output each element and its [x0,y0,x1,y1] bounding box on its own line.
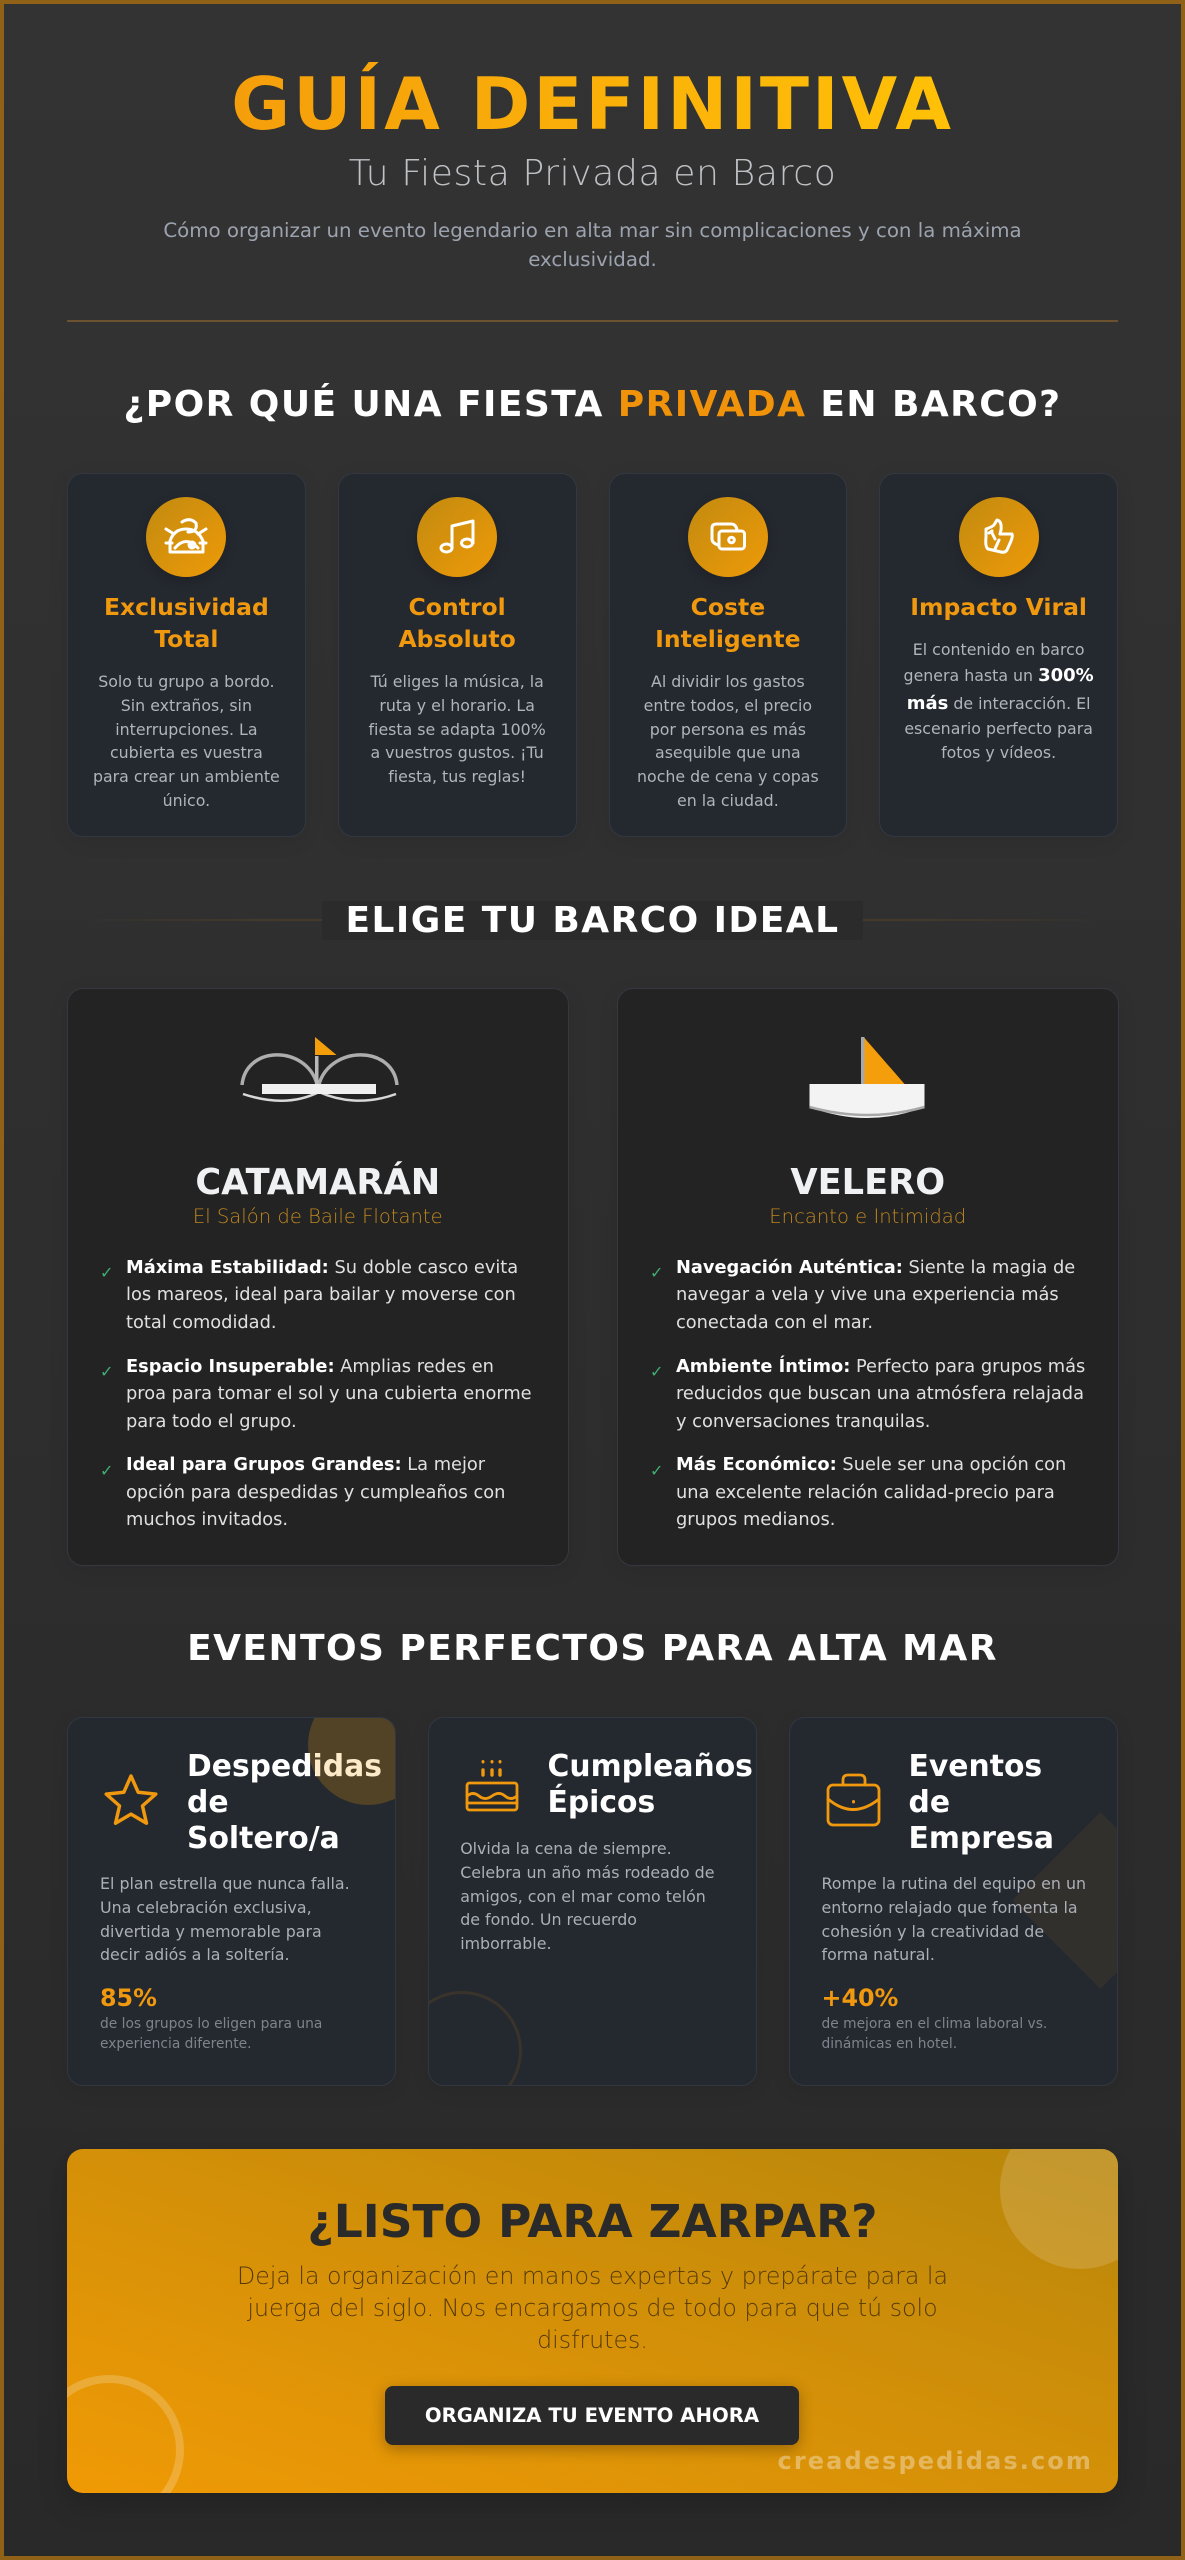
intro text: Cómo organizar un evento legendario en alta mar sin complicaciones y con la máxima [163,219,1022,242]
card text: genera hasta un 300% [904,665,1094,686]
boat title: VELERO [790,1162,945,1203]
icon: pulgar [959,497,1039,577]
feature list: ✓ [100,1461,113,1480]
card title [548,1749,753,1820]
card title: Empresa [908,1821,1054,1856]
intro text: exclusividad. [528,248,657,270]
card text: asequible que una [655,743,801,762]
card title: Impacto Viral [910,593,1087,621]
icon: exclusividad [146,497,226,577]
icon: billetes [688,497,768,577]
card text: entorno relajado que fomenta la [822,1898,1078,1917]
card title: Control [409,593,506,621]
icon: tarta [466,1760,518,1812]
feature list: ✓ [100,1362,113,1381]
card text: Celebra un año más rodeado de [460,1863,714,1882]
feature list: Espacio Insuperable: Amplias redes en [126,1356,494,1376]
icon: catamarán [240,1037,399,1102]
card title: Despedidas [187,1749,382,1784]
card text: Tú eliges la música, la [370,672,544,691]
panel: coste inteligente [608,473,847,837]
feature list: proa para tomar el sol y una cubierta enorme [126,1383,532,1404]
card text [368,672,546,786]
card text: entre todos, el precio [644,696,812,715]
card title [398,593,516,653]
card text: Sin extraños, sin [121,696,252,715]
card title: Total [154,625,218,653]
card text: fotos y vídeos. [941,743,1056,762]
cta text: disfrutes. [537,2326,648,2354]
card title [104,593,269,653]
card text [93,672,280,810]
boat subtitle: Encanto e Intimidad [769,1205,966,1228]
panel: impacto viral [879,473,1118,837]
card text: Al dividir los gastos [651,672,805,691]
panel: control absoluto [338,473,576,837]
card title: Coste [691,593,765,621]
card text: interrupciones. La [115,720,258,739]
card text: noche de cena y copas [637,767,819,786]
boat title: CATAMARÁN [195,1162,440,1203]
feature list [650,1256,1085,1530]
card title: Épicos [548,1785,655,1820]
card text: Solo tu grupo a bordo. [98,672,275,691]
card text: El plan estrella que nunca falla. [100,1874,350,1893]
feature list: ✓ [650,1362,663,1381]
card title: Inteligente [655,625,801,653]
stat caption: de los grupos lo eligen para una [100,2016,322,2032]
feature list: navegar a vela y vive una experiencia más [676,1284,1059,1305]
feature list: Máxima Estabilidad: Su doble casco evita [126,1256,518,1278]
feature list: total comodidad. [126,1312,277,1332]
card text: El contenido en barco [913,640,1084,659]
card text: amigos, con el mar como telón [460,1887,706,1906]
panel: despedidas [67,1717,396,2086]
icon: velero [809,1037,925,1118]
heading: eventos: EVENTOS PERFECTOS PARA ALTA MAR [187,1628,998,1669]
stat caption: dinámicas en hotel. [822,2036,957,2052]
card text [100,1874,350,1964]
panel: exclusividad total [67,473,306,837]
card text: de fondo. Un recuerdo [460,1910,637,1929]
feature list: una excelente relación calidad-precio para [676,1482,1055,1502]
card text: ruta y el horario. La [379,696,535,715]
feature list: ✓ [650,1263,663,1282]
feature list: grupos medianos. [676,1509,835,1530]
card text: Rompe la rutina del equipo en un [822,1874,1086,1893]
card text: en la ciudad. [677,791,779,810]
cta button [385,2386,799,2445]
cta text: Deja la organización en manos expertas y prepárate para la [237,2262,948,2290]
boat subtitle: El Salón de Baile Flotante [193,1205,443,1228]
panel: catamarán [67,988,568,1566]
card text: Olvida la cena de siempre. [460,1839,672,1858]
card title [187,1749,382,1856]
feature list: opción para despedidas y cumpleaños con [126,1482,505,1502]
feature list: Navegación Auténtica: Siente la magia de [676,1256,1075,1278]
feature list: los mareos, ideal para bailar y moverse con [126,1284,516,1305]
card text: decir adiós a la soltería. [100,1945,289,1964]
feature list: Ideal para Grupos Grandes: La mejor [126,1454,485,1475]
card text: fiesta, tus reglas! [388,767,526,786]
card text: forma natural. [822,1945,935,1964]
stat caption [100,2016,322,2052]
card text: divertida y memorable para [100,1922,322,1941]
card title: de [187,1785,229,1820]
card text: Una celebración exclusiva, [100,1898,312,1917]
title: GUÍA DEFINITIVA [231,62,954,146]
icon: estrella [104,1774,158,1825]
card text [822,1874,1086,1964]
feature list [100,1256,532,1530]
card text: para crear un ambiente [93,767,280,786]
card title: Eventos [908,1749,1042,1784]
card text: cohesión y la creatividad de [822,1922,1044,1941]
card title [655,593,801,653]
card title: Soltero/a [187,1821,340,1856]
card text [637,672,819,810]
feature list: muchos invitados. [126,1509,288,1530]
feature list: Más Económico: Suele ser una opción con [676,1454,1066,1475]
panel: call to action [67,2149,1118,2493]
icon: música [417,497,497,577]
feature list: conectada con el mar. [676,1312,873,1332]
feature list: ✓ [650,1461,663,1480]
card text: cubierta es vuestra [110,743,263,762]
card text: a vuestros gustos. ¡Tu [370,743,544,762]
card title: Absoluto [398,625,516,653]
card text: escenario perfecto para [904,719,1093,738]
card title: Cumpleaños [548,1749,753,1784]
panel: cumpleaños [428,1717,756,2086]
card title: de [908,1785,950,1820]
heading: elige tu barco: ELIGE TU BARCO IDEAL [346,900,839,941]
panel: empresa [788,1717,1118,2086]
card text: fiesta se adapta 100% [368,720,546,739]
feature list: y conversaciones tranquilas. [676,1410,930,1432]
card text: más de interacción. El [907,693,1090,714]
stat: +40% [822,1984,898,2012]
stat caption: de mejora en el clima laboral vs. [822,2016,1047,2032]
cta text: juerga del siglo. Nos encargamos de todo para que tú solo [247,2294,938,2322]
cta button: ORGANIZA TU EVENTO AHORA [425,2404,759,2427]
panel: velero [617,988,1118,1566]
heading: por qué: ¿POR QUÉ UNA FIESTA PRIVADA EN BARCO? [123,384,1062,425]
stat caption: experiencia diferente. [100,2036,251,2052]
watermark: creadespedidas.com [778,2447,1093,2475]
card text: por persona es más [650,720,806,739]
cta text [237,2262,948,2354]
card title: Exclusividad [104,593,269,621]
card text [904,640,1094,762]
intro text [163,219,1022,270]
feature list: reducidos que buscan una atmósfera relajada [676,1383,1084,1404]
stat caption [822,2016,1047,2052]
icon: maletín [826,1774,880,1826]
card text: único. [163,791,210,810]
cta heading: ¿LISTO PARA ZARPAR? [307,2195,878,2248]
stat: 85% [100,1984,157,2012]
card text [460,1839,714,1953]
feature list: para todo el grupo. [126,1410,297,1432]
feature list: Ambiente Íntimo: Perfecto para grupos más [676,1356,1085,1376]
feature list: ✓ [100,1263,113,1282]
card title [908,1749,1054,1856]
subtitle: Tu Fiesta Privada en Barco [349,152,836,194]
card text: imborrable. [460,1934,551,1953]
